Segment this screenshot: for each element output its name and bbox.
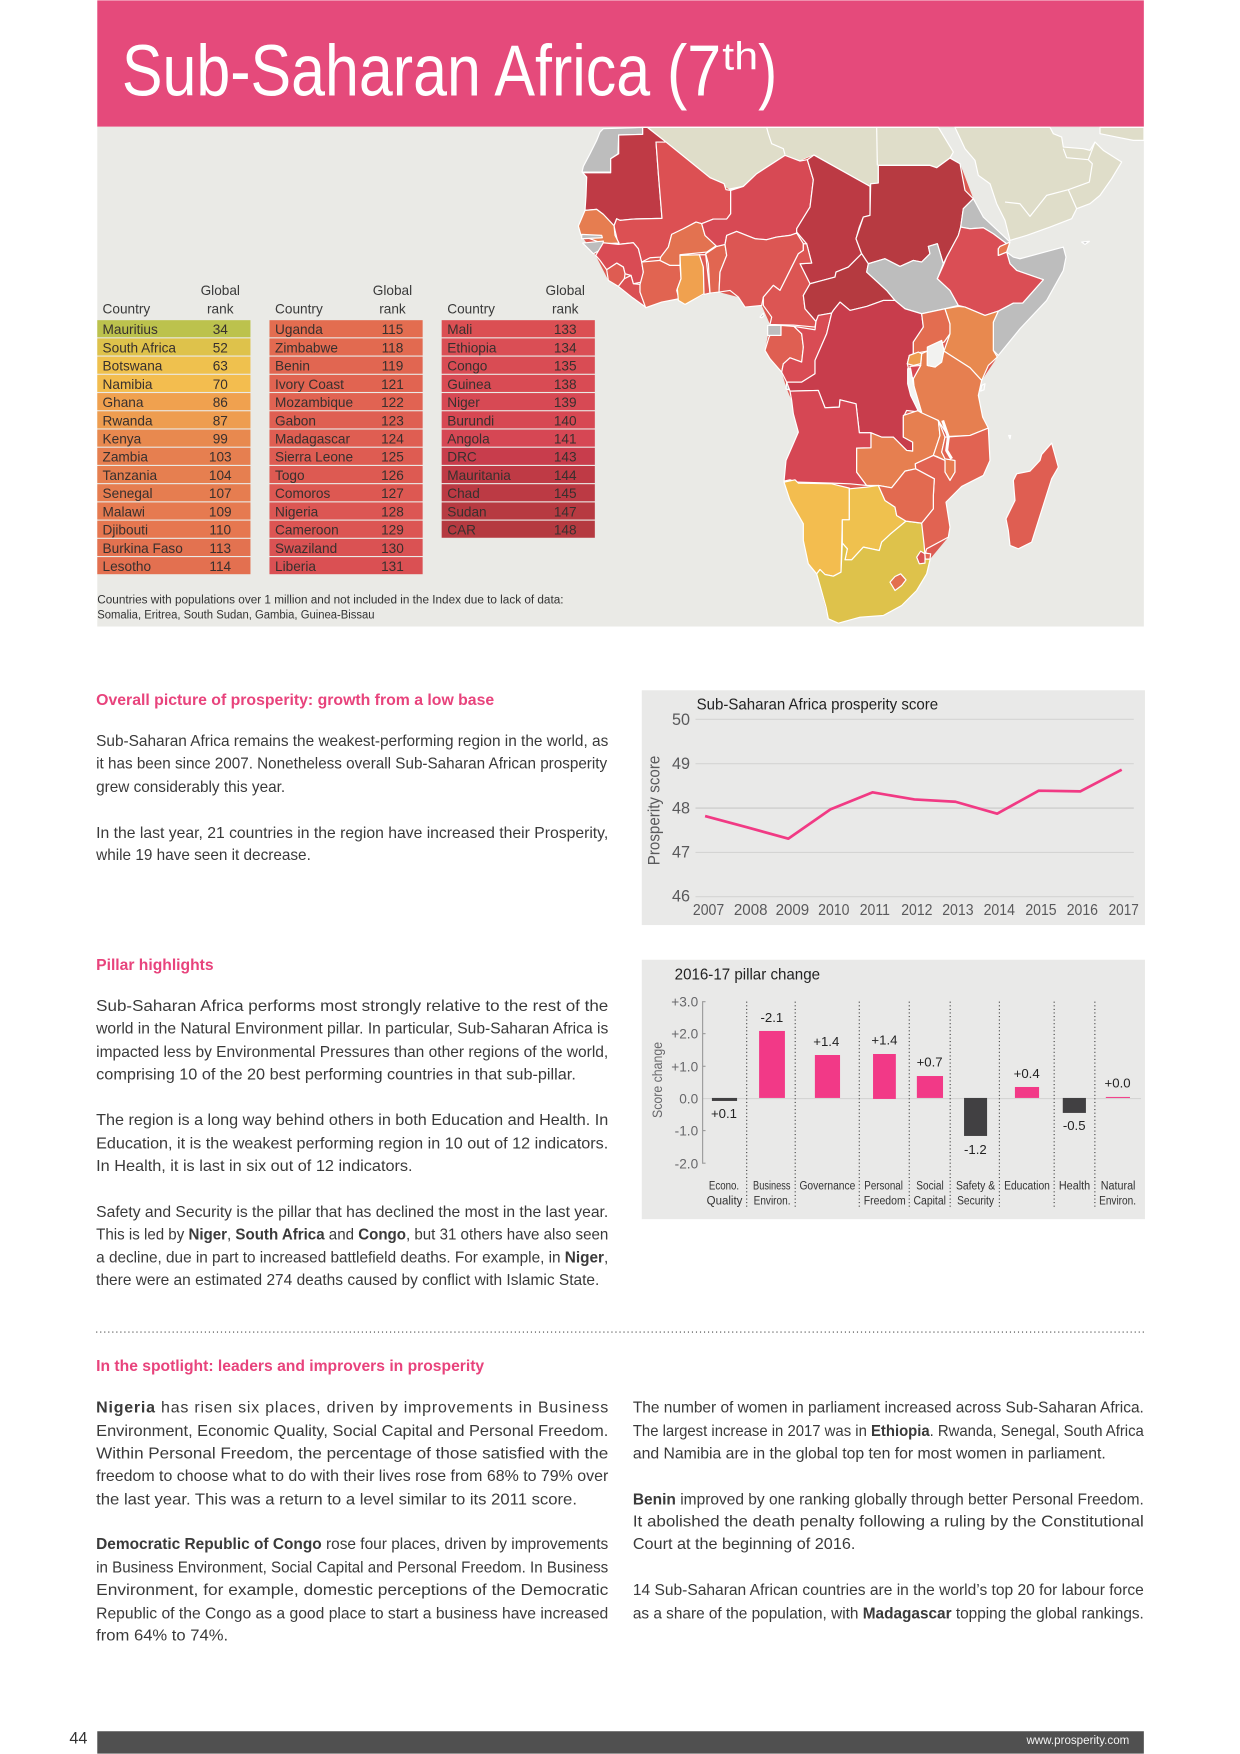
table: ranks 133-148: 143 <box>554 450 577 465</box>
pillar labels: Quality <box>707 1194 743 1207</box>
table: ranks 115-131: 123 <box>381 413 404 428</box>
table: ranks 133-148: 144 <box>554 468 577 483</box>
Yemen Oman border <box>1068 190 1077 209</box>
table: ranks 34-114: Djibouti <box>103 523 148 538</box>
y axis labels: 50 <box>672 711 690 729</box>
text block: overall picture: grew considerably this year. <box>96 779 285 796</box>
table: ranks 34-114: 86 <box>213 395 228 410</box>
table: ranks 34-114: 103 <box>209 450 232 465</box>
Mozambique <box>915 428 990 559</box>
pillar labels: Personal <box>864 1179 903 1192</box>
pillar labels: Governance <box>799 1179 855 1192</box>
table: ranks 115-131: Ivory Coast <box>275 377 344 392</box>
table: ranks 133-148: Guinea <box>447 377 492 392</box>
y axis labels: +1.0 <box>671 1059 699 1074</box>
heading: spotlight: In the spotlight: leaders and improvers in prosperity <box>96 1358 484 1375</box>
x axis labels: 2007 <box>693 902 724 919</box>
Algeria Libya border <box>767 127 785 155</box>
table: ranks 133-148: 140 <box>554 413 577 428</box>
land underlay <box>578 142 998 623</box>
table: ranks 34-114: 113 <box>209 541 231 556</box>
x axis labels: 2009 <box>776 902 809 919</box>
table: ranks 133-148: Ethiopia <box>447 340 497 355</box>
table: ranks 34-114: Namibia <box>103 377 153 392</box>
y axis labels: +2.0 <box>671 1027 699 1042</box>
y axis title: Score change <box>650 1042 665 1118</box>
text block: pillar highlights: The region is a long way behind others in both Education and Health. In <box>96 1112 608 1129</box>
text block: spotlight left column: from 64% to 74%. <box>96 1628 228 1645</box>
Lake Malawi <box>943 420 952 459</box>
pillar labels: Social <box>916 1179 944 1192</box>
table: ranks 34-114: Tanzania <box>103 468 157 483</box>
text block: spotlight left column: Environment, Economic Quality, Social Capital and Personal Freedom. <box>96 1423 608 1440</box>
table header: Global <box>546 283 585 298</box>
table: ranks 115-131: Zimbabwe <box>275 340 338 355</box>
pillar labels: Natural <box>1101 1179 1135 1192</box>
Lake Tanganyika <box>908 369 922 412</box>
x axis labels: 2016 <box>1067 902 1098 919</box>
Zambia <box>857 410 940 488</box>
table: ranks 115-131: Sierra Leone <box>275 450 353 465</box>
x axis labels <box>693 902 1139 919</box>
table: ranks 133-148: Sudan <box>447 504 487 519</box>
table header: rank <box>207 301 234 316</box>
pillar labels <box>707 1179 1136 1207</box>
panel: pillar change bar chart <box>642 960 1145 1219</box>
text block: pillar highlights: a decline, due in part to increased battlefield deaths. For example, in Niger, <box>96 1250 608 1267</box>
table: ranks 115-131: Togo <box>275 468 305 483</box>
table: ranks 34-114: 87 <box>213 413 228 428</box>
y axis labels: 48 <box>672 799 690 817</box>
table: ranks 115-131: Madagascar <box>275 432 350 447</box>
table: ranks 115-131: 119 <box>382 359 403 374</box>
panel: map and ranking <box>97 127 1144 627</box>
table footnote <box>97 594 564 622</box>
x axis labels: 2010 <box>818 902 850 919</box>
text block: spotlight left column: in Business Environment, Social Capital and Personal Freedom. In Business <box>96 1559 608 1576</box>
text block: pillar highlights: comprising 10 of the 20 best performing countries in that sub-pillar. <box>96 1066 576 1083</box>
UAE Oman border <box>1088 142 1095 160</box>
text block: spotlight left column: the last year. This was a return to a level similar to its 2011 score. <box>96 1491 577 1508</box>
text block: spotlight right column: The number of women in parliament increased across Sub-Saharan Africa. <box>633 1400 1144 1417</box>
Zanzibar islands <box>981 384 985 391</box>
text block: spotlight right column: and Namibia are in the global top ten for most women in parliament. <box>633 1445 1106 1462</box>
Democratic Republic of Congo <box>787 300 923 451</box>
text block: pillar highlights: Sub-Saharan Africa performs most strongly relative to the rest of the <box>96 998 608 1015</box>
text block: overall picture: while 19 have seen it decrease. <box>95 847 311 864</box>
table: ranks 133-148: 138 <box>554 377 577 392</box>
text block: pillar highlights: impacted less by Environmental Pressures than other regions of the world, <box>96 1044 608 1061</box>
value labels: +1.4 <box>871 1033 897 1048</box>
table: ranks 115-131: 129 <box>381 523 404 538</box>
Western Sahara <box>582 127 643 172</box>
Sudan <box>856 158 973 266</box>
text block: pillar highlights: Education, it is the weakest performing region in 10 out of 12 indicators. <box>96 1136 608 1153</box>
Burkina Faso <box>660 222 717 265</box>
table header: rank <box>379 301 406 316</box>
text block: pillar highlights: Safety and Security is the pillar that has declined the most in the last year. <box>96 1204 608 1221</box>
table: ranks 115-131: Uganda <box>275 322 323 337</box>
y axis labels <box>672 711 690 906</box>
text block: pillar highlights: world in the Natural Environment pillar. In particular, Sub-Saharan Africa is <box>95 1021 608 1038</box>
pillar labels: Environ. <box>1099 1194 1136 1207</box>
pillar labels: Econo. <box>709 1179 739 1192</box>
y axis title: Prosperity score <box>646 756 664 865</box>
Togo <box>699 255 710 294</box>
table: ranks 133-148: Niger <box>447 395 480 410</box>
table: ranks 133-148: 139 <box>554 395 577 410</box>
Tanzania <box>913 351 988 436</box>
x axis labels: 2011 <box>860 902 890 919</box>
table: ranks 34-114: Burkina Faso <box>103 541 183 556</box>
table: ranks 133-148: 145 <box>554 486 577 501</box>
map of Sub-Saharan Africa <box>578 127 1144 623</box>
table: ranks 133-148: 147 <box>554 504 577 519</box>
text block: spotlight right column: Benin improved by one ranking globally through better Personal Freedom. <box>633 1491 1144 1508</box>
Gabon <box>765 325 803 372</box>
table: ranks 34-114: Kenya <box>103 432 142 447</box>
title banner: th <box>722 36 758 79</box>
table: ranks 115-131: Liberia <box>275 559 316 574</box>
table: ranks 133-148: Burundi <box>447 413 494 428</box>
table: ranks 34-114: Rwanda <box>103 413 153 428</box>
value labels: +1.4 <box>813 1034 839 1049</box>
table header: Country <box>447 301 495 316</box>
text block: overall picture: In the last year, 21 countries in the region have increased their Prosperity, <box>96 825 608 842</box>
pillar labels: Safety & <box>956 1179 995 1192</box>
Chad <box>797 155 870 284</box>
value labels: -2.1 <box>760 1010 783 1025</box>
Liberia <box>618 275 646 307</box>
table: ranks 133-148: 133 <box>554 322 577 337</box>
bars <box>712 1031 1130 1136</box>
Mali <box>614 142 731 262</box>
Central African Republic <box>803 254 895 321</box>
table: ranks 115-131: Swaziland <box>275 541 337 556</box>
table: ranks 34-114: Mauritius <box>103 322 158 337</box>
table: ranks 34-114: 109 <box>209 504 232 519</box>
title banner: Sub-Saharan Africa (7 <box>122 30 721 111</box>
text block: overall picture: it has been since 2007. Nonetheless overall Sub-Saharan African prosperity <box>96 756 607 773</box>
table: ranks 115-131: 125 <box>381 450 404 465</box>
table: ranks 34-114: 99 <box>213 432 228 447</box>
Nigeria <box>719 231 803 307</box>
table: ranks 34-114: Malawi <box>103 504 145 519</box>
table: ranks 133-148 <box>442 283 595 538</box>
table: ranks 34-114: 34 <box>213 322 228 337</box>
table: ranks 133-148: Mauritania <box>447 468 511 483</box>
table header <box>447 283 585 316</box>
Malawi <box>933 420 955 480</box>
table: ranks 115-131 <box>269 283 423 574</box>
table footnote: Countries with populations over 1 million and not included in the Index due to lack of data: <box>97 594 564 607</box>
table header: Global <box>373 283 412 298</box>
value labels: +0.4 <box>1014 1066 1040 1081</box>
pillar labels: Capital <box>914 1194 946 1207</box>
x axis labels: 2014 <box>984 902 1015 919</box>
table: ranks 34-114: 63 <box>213 359 228 374</box>
Equatorial Guinea <box>768 325 781 335</box>
Sierra Leone <box>607 263 625 286</box>
table: ranks 115-131: 115 <box>382 322 403 337</box>
Eritrea <box>961 199 1010 244</box>
chart title: Sub-Saharan Africa prosperity score <box>697 696 938 713</box>
Mauritania <box>583 127 666 226</box>
Senegal <box>578 209 619 244</box>
panel: prosperity score line chart <box>642 690 1145 925</box>
Botswana <box>842 485 906 560</box>
y axis labels: 47 <box>672 843 690 861</box>
table: ranks 133-148: 135 <box>554 359 577 374</box>
text block: spotlight right column: It abolished the death penalty following a ruling by the Constitutional <box>633 1514 1144 1531</box>
text block: pillar highlights: there were an estimated 274 deaths caused by conflict with Islamic State. <box>96 1272 599 1289</box>
value labels: -1.2 <box>964 1142 987 1157</box>
Benin <box>706 244 727 293</box>
Guinea <box>596 243 643 284</box>
y axis labels <box>671 995 699 1171</box>
value labels: +0.7 <box>917 1055 943 1070</box>
table: ranks 115-131: Mozambique <box>275 395 353 410</box>
x axis labels: 2015 <box>1025 902 1057 919</box>
table: ranks 115-131: Gabon <box>275 413 316 428</box>
table: ranks 34-114: 52 <box>213 340 228 355</box>
footer bar <box>97 1731 1144 1754</box>
text block: spotlight right column: The largest increase in 2017 was in Ethiopia. Rwanda, Senegal, South Africa <box>633 1423 1144 1440</box>
y axis labels: 0.0 <box>679 1092 699 1107</box>
table: ranks 115-131: 128 <box>381 504 404 519</box>
Bioko island <box>760 313 764 318</box>
Cabinda <box>786 382 792 390</box>
page number: 44 <box>69 1730 87 1748</box>
x axis labels: 2012 <box>901 902 933 919</box>
value labels: -0.5 <box>1063 1118 1086 1133</box>
Burundi <box>910 365 921 379</box>
table: ranks 133-148: Congo <box>447 359 487 374</box>
table header <box>103 283 240 316</box>
y axis labels: -1.0 <box>675 1124 699 1139</box>
Zimbabwe <box>878 469 934 523</box>
Madagascar <box>1006 443 1058 549</box>
Uganda <box>913 309 950 354</box>
table: ranks 34-114: Zambia <box>103 450 148 465</box>
prosperity line <box>705 770 1122 839</box>
footer URL: www.prosperity.com <box>1025 1734 1129 1747</box>
Swaziland <box>917 551 925 564</box>
Ethiopia <box>937 227 1043 315</box>
Arabian Peninsula <box>955 127 1122 240</box>
Somalia <box>993 247 1066 355</box>
heading: pillar highlights: Pillar highlights <box>96 957 214 974</box>
text block: spotlight right column: Court at the beginning of 2016. <box>633 1536 855 1553</box>
table: ranks 115-131: 131 <box>381 559 404 574</box>
text block: spotlight right column: as a share of the population, with Madagascar topping the global rankings. <box>633 1605 1144 1622</box>
Lake Victoria <box>927 340 944 367</box>
text block: spotlight left column: Republic of the Congo as a good place to start a business have increased <box>96 1605 608 1622</box>
table: ranks 34-114 <box>97 283 250 574</box>
table: ranks 34-114: 107 <box>209 486 232 501</box>
y axis labels: 46 <box>672 888 690 906</box>
table: ranks 133-148: 141 <box>554 432 577 447</box>
table: ranks 115-131: 121 <box>381 377 404 392</box>
Guinea-Bissau <box>583 241 603 254</box>
Lesotho <box>890 574 906 590</box>
value labels: +0.1 <box>711 1106 737 1121</box>
text block: overall picture: Sub-Saharan Africa remains the weakest-performing region in the world, as <box>96 733 608 750</box>
Gambia <box>582 234 602 239</box>
Arabian borders <box>1005 149 1092 216</box>
table header: Country <box>275 301 323 316</box>
table header: Country <box>103 301 150 316</box>
pillar labels: Environ. <box>754 1194 791 1207</box>
text block: spotlight left column: Environment, for example, domestic perceptions of the Democratic <box>96 1582 608 1599</box>
table header <box>275 283 412 316</box>
Angola <box>784 390 871 485</box>
value labels <box>711 1010 1131 1157</box>
value labels: +0.0 <box>1105 1076 1131 1091</box>
Socotra <box>1082 241 1089 244</box>
text block: spotlight left column: Nigeria has risen six places, driven by improvements in Business <box>96 1400 608 1417</box>
Namibia <box>784 480 849 576</box>
chart title: 2016-17 pillar change <box>675 966 820 983</box>
pillar labels: Education <box>1004 1179 1050 1192</box>
table: ranks 115-131: 127 <box>381 486 404 501</box>
title banner <box>97 0 1144 127</box>
table: ranks 133-148: Mali <box>447 322 472 337</box>
South Africa <box>817 521 930 623</box>
North Africa <box>647 127 953 190</box>
y axis labels: 49 <box>672 755 690 773</box>
table: ranks 133-148: DRC <box>447 450 477 465</box>
table: ranks 133-148: Chad <box>447 486 480 501</box>
y axis labels: +3.0 <box>671 995 699 1010</box>
table: ranks 115-131: 130 <box>381 541 404 556</box>
Niger <box>702 155 813 246</box>
pillar labels: Business <box>753 1179 791 1192</box>
text block: pillar highlights: This is led by Niger, South Africa and Congo, but 31 others have also seen <box>96 1226 608 1243</box>
Congo <box>782 313 832 382</box>
pillar labels: Freedom <box>864 1194 906 1207</box>
table: ranks 115-131: Nigeria <box>275 504 319 519</box>
table: ranks 115-131: 124 <box>381 432 404 447</box>
text block: spotlight left column: freedom to choose what to do with their lives rose from 68% to 79% over <box>96 1468 609 1485</box>
Iran coast <box>1100 127 1144 140</box>
Libya Egypt border <box>876 127 878 165</box>
table: ranks 34-114: Lesotho <box>103 559 151 574</box>
text block: spotlight left column: Democratic Republic of Congo rose four places, driven by improvements <box>96 1536 608 1553</box>
table: ranks 34-114: Ghana <box>103 395 144 410</box>
table footnote: Somalia, Eritrea, South Sudan, Gambia, Guinea-Bissau <box>97 609 375 622</box>
Cameroon <box>763 244 816 327</box>
title banner: ) <box>758 30 777 111</box>
table: ranks 115-131: Benin <box>275 359 310 374</box>
table: ranks 34-114: 110 <box>209 523 232 538</box>
table: ranks 34-114: Senegal <box>103 486 153 501</box>
table header: rank <box>552 301 579 316</box>
South Sudan <box>867 244 958 314</box>
table: ranks 34-114: 104 <box>209 468 232 483</box>
table: ranks 115-131: 126 <box>381 468 404 483</box>
x axis labels: 2008 <box>734 902 768 919</box>
table: ranks 115-131: Cameroon <box>275 523 339 538</box>
text block: spotlight left column: Within Personal Freedom, the percentage of those satisfied with the <box>96 1445 608 1462</box>
table: ranks 133-148: CAR <box>447 523 476 538</box>
table: ranks 115-131: 122 <box>381 395 404 410</box>
table: ranks 133-148: 134 <box>554 340 577 355</box>
table: ranks 133-148: Angola <box>447 432 490 447</box>
table: ranks 34-114: Botswana <box>103 359 163 374</box>
table: ranks 115-131: Comoros <box>275 486 331 501</box>
Ghana <box>677 255 704 304</box>
table: ranks 133-148: 148 <box>554 523 577 538</box>
x axis labels: 2017 <box>1109 902 1139 919</box>
heading: overall picture: Overall picture of prosperity: growth from a low base <box>96 692 494 709</box>
text block: overall picture <box>95 733 608 864</box>
table header: Global <box>201 283 240 298</box>
Djibouti <box>998 242 1010 255</box>
Ivory Coast <box>640 260 681 308</box>
Comoros islands <box>1009 435 1011 439</box>
table: ranks 34-114: South Africa <box>103 340 176 355</box>
table: ranks 34-114: 114 <box>209 559 232 574</box>
text block: spotlight right column <box>633 1400 1144 1622</box>
text block: spotlight right column: 14 Sub-Saharan African countries are in the world’s top 20 for labour force <box>633 1582 1144 1599</box>
Kenya <box>944 306 998 380</box>
text block: pillar highlights: In Health, it is last in six out of 12 indicators. <box>96 1158 413 1175</box>
table: ranks 34-114: 70 <box>213 377 228 392</box>
text block: spotlight left column <box>96 1400 609 1645</box>
pillar labels: Security <box>957 1194 994 1207</box>
Rwanda <box>907 352 922 365</box>
text block: pillar highlights <box>95 998 608 1289</box>
x axis labels: 2013 <box>942 902 974 919</box>
pillar labels: Health <box>1059 1179 1090 1192</box>
y axis labels: -2.0 <box>675 1156 699 1171</box>
table: ranks 115-131: 118 <box>382 340 403 355</box>
